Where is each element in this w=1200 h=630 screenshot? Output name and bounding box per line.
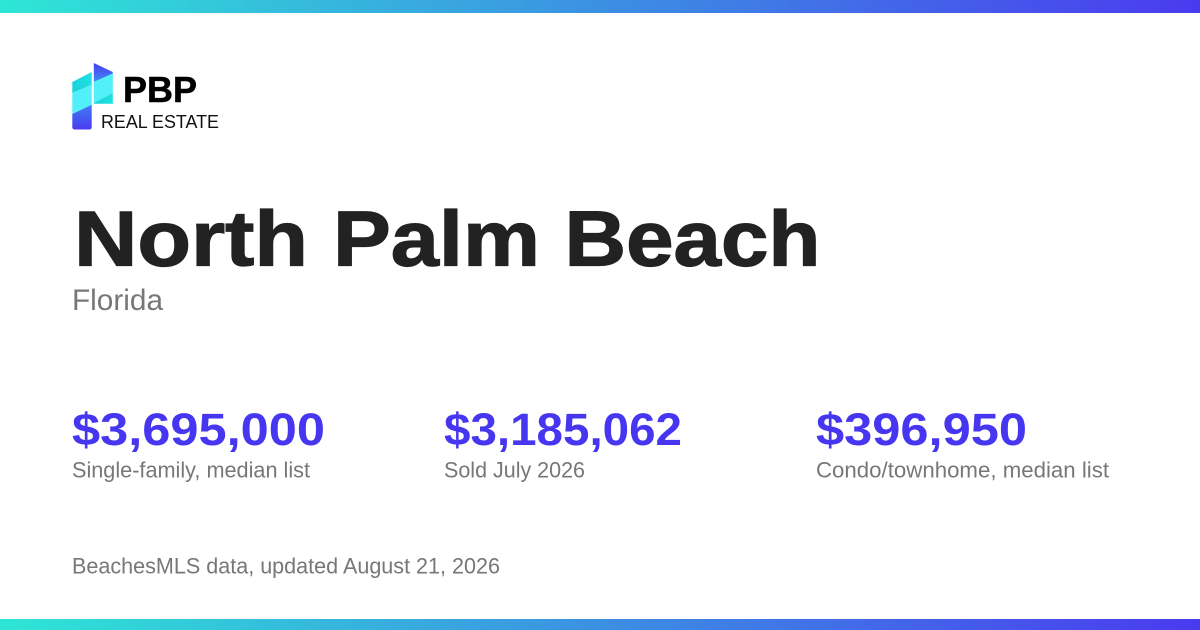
- label: Condo/townhome, median list: [816, 458, 1109, 482]
- logo wordmark: PBP: PBP: [123, 69, 197, 110]
- title: Beach: [564, 194, 820, 282]
- stat: condo/townhome median list: [816, 404, 1109, 482]
- title: North: [74, 194, 308, 282]
- subtitle: Florida: [72, 284, 164, 317]
- top gradient bar: [0, 0, 1200, 13]
- source note: BeachesMLS data, updated August 21, 2026: [72, 554, 500, 578]
- value: $3,695,000: [72, 404, 325, 455]
- icon: building mark: [72, 63, 113, 130]
- value: $396,950: [816, 404, 1027, 455]
- title: [74, 194, 820, 282]
- logo: [72, 63, 219, 132]
- label: Sold July 2026: [444, 458, 585, 482]
- title: Palm: [333, 194, 540, 282]
- value: $3,185,062: [444, 404, 682, 455]
- stat: single-family median list: [72, 404, 325, 482]
- logo wordmark: Real Estate: REAL ESTATE: [101, 111, 219, 132]
- stat: sold: [444, 404, 682, 482]
- label: Single-family, median list: [72, 458, 310, 482]
- bottom gradient bar: [0, 619, 1200, 630]
